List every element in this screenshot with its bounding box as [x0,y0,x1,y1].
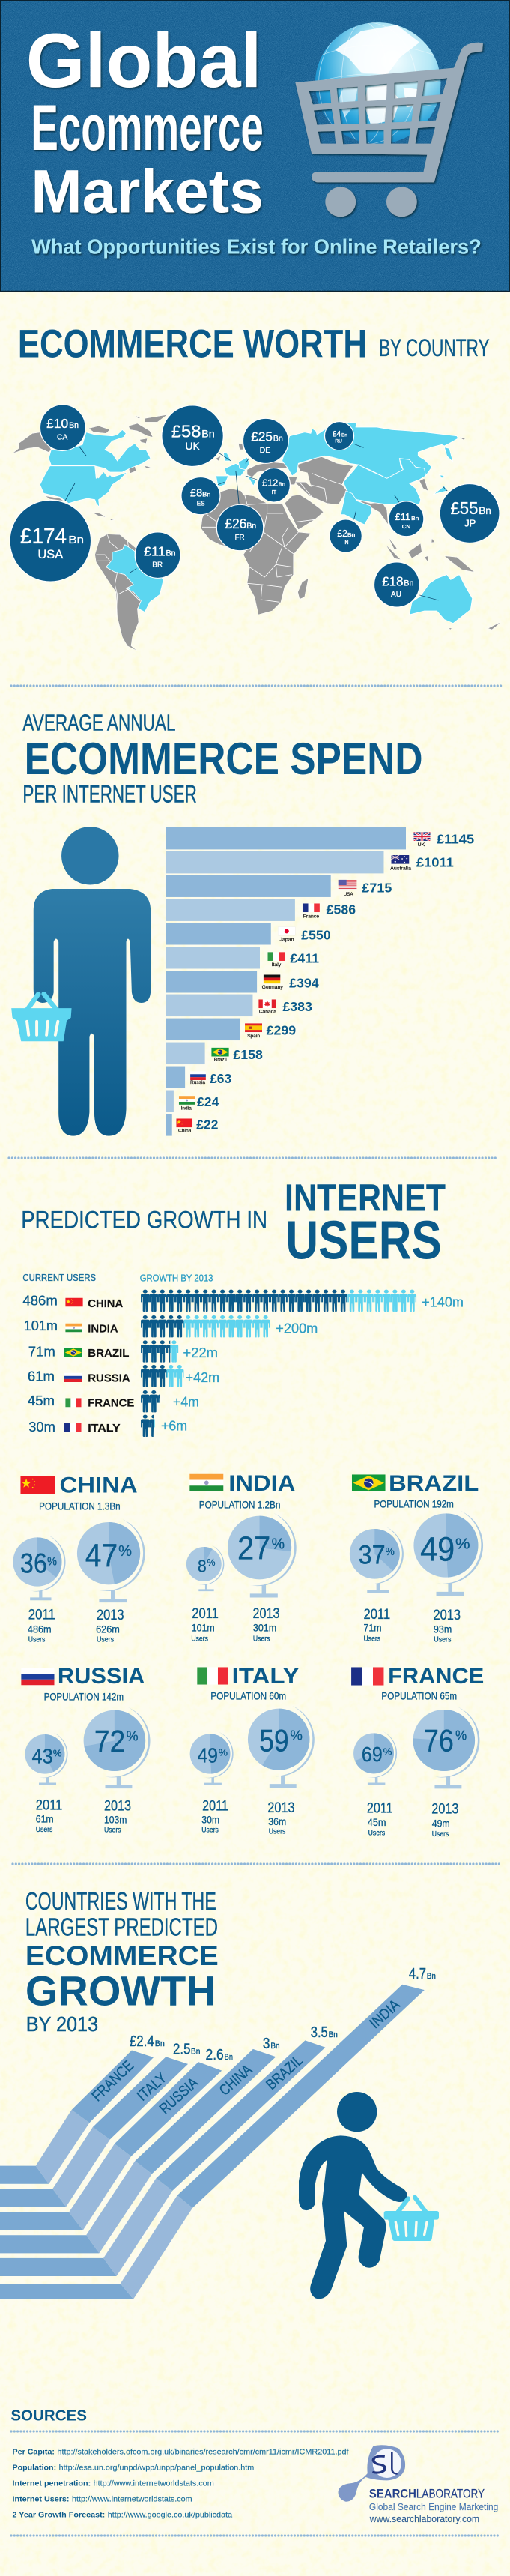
heading: BY 2013 [26,2012,98,2036]
source list: http://www.internetworldstats.com [94,2479,214,2488]
label: UK: UK [418,842,425,848]
heading: COUNTRIES WITH THE [25,1888,216,1915]
bubble: Australia [374,562,419,607]
chart: growth staircase Italy [0,2040,201,2207]
panel: country internet penetration [13,1471,484,1839]
row: India [24,1315,318,1337]
row: France: +4m [173,1393,199,1410]
label: UK [413,832,474,848]
chart: growth staircase Russia: Bn [225,2052,233,2062]
source list: http://www.internetworldstats.com [72,2494,192,2503]
bubble: Spain: Bn [202,492,210,498]
row: Russia: +42m [186,1369,219,1385]
card: Italy: Users [201,1826,219,1834]
card: Russia: 103m [104,1814,127,1826]
bubble: Canada: £10 [46,416,68,431]
row: China: +140m [422,1294,464,1310]
stair label: China: CHINA [216,2061,255,2099]
bubble: France: £26 [225,516,246,531]
card: Italy [190,1663,315,1836]
card: Brazil: 71m [364,1623,381,1634]
bubble: Spain [181,477,220,515]
heading [22,710,423,808]
row: Russia [28,1365,219,1387]
bubble: India [330,519,362,552]
card: India: 2013 [252,1605,279,1621]
label: Italy: £411 [290,951,319,965]
bubble: China: Bn [411,515,419,522]
card: France: FRANCE [388,1663,484,1689]
chart: growth staircase Brazil [0,2024,338,2276]
bubble: Spain: £8 [190,487,202,499]
logo: Search Laboratory [339,2445,498,2524]
label: Australia [390,855,454,872]
row: Italy: ITALY [88,1422,121,1434]
card: France: 49m [432,1818,450,1830]
label: Russia [190,1071,231,1086]
card: France: 69 [362,1743,383,1766]
stair label: Russia: RUSSIA [157,2075,201,2117]
label: China: China [178,1129,192,1133]
bubble: Japan [440,484,500,543]
label: Germany: Germany [262,985,283,990]
heading [25,1888,219,2036]
bubble: Canada [40,405,85,450]
row: Brazil: BRAZIL [88,1347,129,1359]
source list: Population: [13,2463,56,2472]
bubble: France: FR [235,533,245,542]
card: France: Users [368,1829,385,1837]
label: Germany [262,974,319,991]
bubble: Italy [258,468,290,502]
bubble: Italy: £12 [262,477,278,489]
bubble: USA: £174 [20,525,67,549]
heading: SOURCES [10,2407,87,2424]
row: Russia: 61m [28,1368,55,1384]
card: Brazil: BRAZIL [389,1471,479,1496]
row: China: 486m [22,1292,58,1309]
label: Japan [278,927,331,942]
label: Canada: Canada [259,1010,276,1014]
bubble: Germany: Bn [273,434,283,443]
bubble: USA [10,500,91,582]
label: India [179,1094,219,1111]
card: Italy: 36m [268,1816,286,1827]
row: China [22,1290,464,1312]
row: Brazil: +22m [183,1345,218,1360]
chart: growth staircase France [0,2032,165,2184]
stair label: France: FRANCE [89,2057,137,2105]
bubble: China [389,501,424,537]
row: India: INDIA [88,1322,118,1335]
bubble: Brazil: BR [152,561,163,569]
card: China: POPULATION 1.3Bn [39,1500,121,1512]
chart: growth staircase India: 4.7 [409,1964,426,1982]
row: Russia: RUSSIA [88,1372,130,1384]
card: India: Users [253,1635,270,1643]
source list: http://www.google.co.uk/publicdata [108,2510,232,2519]
bar chart: spend per user [166,827,406,1136]
bubble: Russia [324,422,354,450]
title: Global [26,19,262,103]
panel: largest predicted ecommerce growth [0,1888,436,2299]
label: Germany: £394 [289,976,319,991]
card: China: 2011 [28,1606,55,1623]
bubble: Japan: £55 [451,498,478,518]
card: France: POPULATION 65m [381,1691,457,1702]
bubble: Australia: £18 [382,574,404,589]
heading: ECOMMERCE SPEND [25,734,423,785]
source list: Per Capita: [13,2447,55,2456]
card: Russia: 61m [36,1814,54,1825]
card: Brazil: Users [364,1635,380,1643]
bubble: Australia: AU [391,590,401,599]
heading: GROWTH [25,1967,216,2015]
row: France: FRANCE [88,1397,134,1409]
bubble: Brazil: £11 [144,544,166,559]
icon: walking person [299,2092,407,2299]
card: Italy: 2011 [202,1797,228,1814]
stair label: Italy: ITALY [134,2069,170,2105]
bubble: China: CN [402,524,410,530]
logo: Search Laboratory: SEARCH [369,2487,416,2501]
card: Brazil: % [455,1536,470,1553]
chart: growth staircase India [0,1964,436,2299]
card: France [351,1663,484,1839]
chart: growth staircase France: Bn [155,2039,165,2048]
label: UK: £1145 [437,832,474,846]
label: USA: £715 [362,881,392,896]
chart: growth staircase China: Bn [270,2040,280,2051]
label: Italy: Italy [272,962,282,968]
chart: growth staircase Italy: 2.5 [173,2040,190,2057]
card: India: 27 [237,1530,270,1566]
card: France: 76 [424,1724,454,1758]
label: India: India [180,1106,192,1111]
row: France: 45m [28,1393,55,1408]
row: Italy: 30m [28,1419,55,1435]
bubble: Italy: Bn [279,480,285,487]
bubble: USA: Bn [68,533,84,546]
card: India [186,1471,297,1643]
row: China: CHINA [88,1297,123,1309]
card: Russia: POPULATION 142m [44,1691,124,1703]
panel: header banner: Ecommerce [31,92,264,164]
row: Brazil: 71m [28,1343,55,1360]
card: India: 301m [253,1623,276,1634]
card: Russia: 2013 [104,1797,131,1814]
label: Italy [267,951,319,968]
card: India: INDIA [228,1471,295,1496]
heading [21,1176,446,1270]
stair label: Brazil: BRAZIL [263,2052,306,2093]
card: Brazil: 37 [359,1540,386,1569]
bubble: Japan: JP [464,518,476,529]
bubble: India: IN [344,540,349,546]
card: Russia: Users [104,1826,121,1834]
card: China: CHINA [59,1473,138,1497]
panel: average annual ecommerce spend [11,710,474,1136]
bubble: Germany: £25 [251,429,273,444]
card: India: 101m [192,1623,215,1634]
card: Russia: 43 [32,1745,53,1768]
card: India: 2011 [192,1605,219,1621]
label: USA: USA [344,892,353,897]
bubble: France: Bn [246,522,256,531]
chart: growth staircase Brazil: 3.5 [311,2024,328,2041]
bubble: Brazil: Bn [166,549,176,558]
label: Canada: £383 [282,999,312,1014]
source list: Internet Users: [13,2494,70,2503]
card: Brazil [350,1471,483,1644]
bubble: Spain: ES [197,500,205,507]
icon: basket [384,2198,439,2241]
card: Italy: POPULATION 60m [210,1691,286,1702]
bubble: UK [162,405,223,466]
label: Japan: Japan [279,938,294,942]
bubble: Canada: Bn [69,421,79,430]
row: France [28,1390,199,1412]
label: Brazil [211,1047,263,1062]
label: Russia: £63 [210,1071,231,1086]
bubble: UK: Bn [201,428,215,440]
source list: Internet penetration: [13,2479,91,2488]
card: China: 2013 [97,1607,124,1623]
card: India: 8 [198,1556,207,1575]
card: Brazil: 93m [434,1623,452,1635]
chart: growth staircase China [0,2034,280,2253]
card: China: 486m [28,1623,52,1635]
card: Russia: RUSSIA [58,1663,145,1689]
bubble: Brazil [135,532,180,578]
heading: ECOMMERCE [25,1940,219,1971]
card: Brazil: % [386,1545,395,1557]
label: France: £586 [327,902,356,917]
label: Brazil: Brazil [214,1057,227,1062]
card: Brazil: 2013 [433,1607,461,1623]
heading: LARGEST PREDICTED [25,1913,218,1941]
label: Spain [245,1023,296,1039]
bubble: UK: £58 [171,421,201,441]
bubble: France [216,504,264,551]
card: France: % [383,1746,392,1758]
column headers: CURRENT USERS [22,1273,96,1283]
title: Markets [31,157,264,226]
bubble: Australia: Bn [404,579,414,588]
card: Italy: % [290,1727,303,1743]
heading: AVERAGE ANNUAL [22,710,176,736]
card: France: 45m [368,1817,386,1828]
bubble: Japan: Bn [479,505,491,516]
card: Brazil: 49 [420,1531,455,1569]
source list: http://esa.un.org/unpd/wpp/unpp/panel_population.htm [59,2463,254,2472]
row: Italy: +6m [161,1417,187,1434]
card: China: 47 [85,1537,118,1574]
card: Italy: 30m [201,1815,219,1826]
card: India: Users [191,1635,208,1643]
card: Brazil: Users [434,1635,452,1644]
card: Brazil: 2011 [364,1606,390,1622]
heading: PREDICTED GROWTH IN [21,1207,267,1234]
card: India: % [207,1557,216,1568]
row: India: 101m [24,1318,58,1333]
label: Spain: £299 [267,1023,296,1037]
card: China: Users [28,1635,46,1644]
label: Japan: £550 [301,928,331,942]
card: India: % [272,1536,285,1553]
bubble: Italy: IT [272,489,276,495]
card: India: POPULATION 1.2Bn [199,1500,280,1511]
card: Russia: 72 [94,1724,125,1759]
chart: growth staircase Russia: 2.6 [205,2045,224,2063]
card: China: Users [97,1635,114,1644]
card: China: % [47,1554,57,1568]
label: Russia: Russia [190,1080,205,1085]
bubble: Russia: RU [335,439,342,444]
label: Brazil: £158 [233,1047,263,1062]
chart: growth staircase India: Bn [427,1971,436,1981]
icon: person figure [34,827,151,1136]
bubble: Russia: Bn [341,432,347,438]
icon: globe in shopping cart [295,22,483,217]
label: France: France [303,914,319,920]
card: China: 36 [20,1548,47,1579]
icon: shopping basket [11,994,72,1041]
card: Italy: 59 [259,1724,289,1758]
card: Brazil: POPULATION 192m [374,1498,454,1510]
bubble: UK: UK [186,441,200,452]
label: China: £22 [196,1117,218,1132]
bubble: India: Bn [347,531,355,538]
label: India: £24 [197,1094,219,1109]
panel: sources [10,2407,498,2524]
chart: growth staircase Russia [0,2045,233,2230]
panel: ecommerce worth by country [10,322,500,651]
card: France: 2013 [431,1800,458,1817]
label: France [303,902,356,920]
bubble: Russia: £4 [333,429,341,438]
bubble: China: £11 [395,512,410,522]
heading: PER INTERNET USER [22,781,197,808]
label: USA [339,880,392,897]
source list: http://stakeholders.ofcom.org.uk/binaries/research/cmr/cmr11/icmr/ICMR2011.pdf [57,2447,349,2456]
label: Canada [258,999,312,1014]
chart: growth staircase Brazil: Bn [329,2030,338,2039]
row: India: +200m [276,1320,318,1336]
leader lines [65,444,447,600]
label: Australia: Australia [390,866,411,872]
card: Italy: Users [269,1827,285,1836]
panel: predicted growth in internet users [21,1176,464,1437]
card: China [13,1473,145,1644]
stair label: India: INDIA [367,1997,404,2032]
source list [13,2447,349,2519]
chart: growth staircase France: £2.4 [130,2032,154,2050]
column headers [22,1273,213,1284]
card: France: 2011 [367,1800,393,1816]
card: Russia [21,1663,150,1834]
card: Italy: ITALY [232,1663,300,1689]
source list: 2 Year Growth Forecast: [13,2510,105,2519]
bubble: Germany [243,418,288,463]
card: Italy: % [219,1747,228,1758]
row: Italy [28,1415,187,1437]
bubble: India: £2 [337,528,347,539]
label: China [176,1117,218,1133]
card: Russia: Users [36,1825,52,1834]
row: Brazil [28,1340,218,1363]
card: France: Users [432,1830,449,1839]
title [26,19,264,226]
map value bubbles [10,405,500,607]
world map: Europe and Africa [201,444,353,615]
card: Russia: % [53,1748,62,1759]
column headers: GROWTH BY 2013 [140,1273,213,1284]
world map: Americas [13,414,167,651]
card: Russia: % [127,1728,139,1744]
card: Italy: 49 [198,1744,218,1767]
label: Spain: Spain [247,1034,260,1039]
card: France: % [455,1727,467,1743]
card: Russia: 2011 [36,1797,62,1813]
card: China: % [118,1542,132,1560]
label: Australia: £1011 [416,855,454,869]
world map: Asia and Oceania [282,422,500,630]
bubble: Canada: CA [57,433,68,441]
bubble: Germany: DE [260,446,271,455]
chart: growth staircase Italy: Bn [191,2046,201,2056]
card: Italy: 2013 [267,1800,294,1815]
bubble: USA: USA [37,548,64,561]
panel: header banner [0,0,510,292]
card: China: 626m [96,1623,120,1635]
chart: growth staircase China: 3 [263,2034,270,2051]
